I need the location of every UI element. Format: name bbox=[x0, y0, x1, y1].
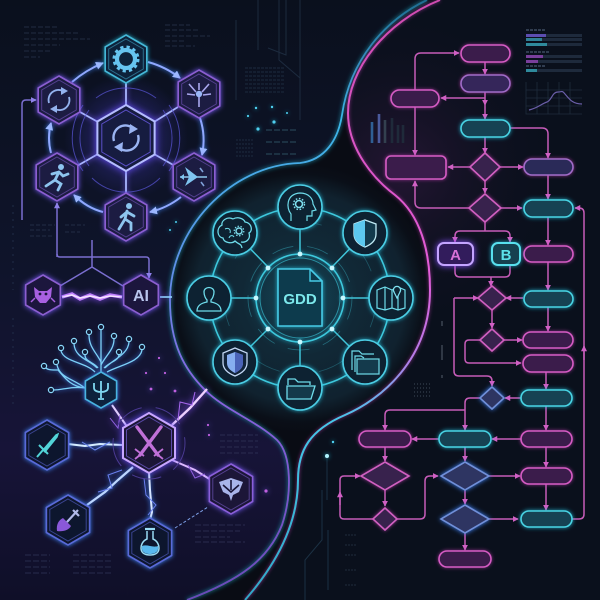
flowchart pink pills bbox=[359, 45, 573, 567]
hexagon: dash bbox=[173, 153, 215, 201]
hexagon: walker bbox=[105, 193, 147, 241]
skill tree end nodes bbox=[41, 324, 145, 393]
option B bbox=[492, 243, 520, 265]
decorative circuit traces and data marks bbox=[13, 0, 442, 600]
chart: top right status bars bbox=[526, 30, 582, 72]
hexagon: spark bulb bbox=[178, 70, 220, 118]
dashed link: potion to shield bbox=[175, 507, 208, 528]
hexagon: gear bbox=[105, 35, 147, 83]
loop ripple rings bbox=[72, 88, 180, 192]
icon: brain with gear bbox=[213, 211, 257, 255]
hexagon: shovel bbox=[46, 495, 90, 545]
hub spokes bbox=[209, 207, 391, 388]
panel: GDD hub bbox=[187, 185, 413, 410]
loop hub connectors bbox=[77, 83, 178, 193]
skill branches bbox=[46, 330, 142, 390]
hub rings bbox=[210, 208, 390, 388]
icon: shield lower bbox=[213, 340, 257, 384]
loop arrows bbox=[49, 62, 204, 212]
GDD document: GDD bbox=[283, 291, 317, 308]
hexagon: potion bbox=[128, 518, 172, 568]
hexagon: cycle bbox=[38, 76, 80, 124]
lightning: enemy to AI bbox=[62, 294, 172, 299]
GDD document bbox=[278, 269, 322, 326]
flowchart violet pills bbox=[461, 75, 573, 175]
right S-curve border bbox=[245, 0, 440, 600]
option B: B bbox=[501, 247, 512, 264]
icon: shield bbox=[343, 211, 387, 255]
panel: combat skill tree bbox=[25, 324, 253, 568]
flowchart diamond: merge bbox=[478, 286, 506, 310]
hexagon: enemy mask bbox=[26, 275, 60, 315]
icon: open folder bbox=[278, 366, 322, 410]
flowchart blue diamonds bbox=[441, 387, 504, 533]
flowchart cyan pills bbox=[439, 120, 573, 527]
option A bbox=[438, 243, 473, 265]
hub hexagon: crossed swords bbox=[113, 407, 185, 479]
central S-curve borders bbox=[170, 0, 427, 600]
lightning bolts from crossed swords bbox=[110, 389, 211, 480]
panel: core gameplay loop bbox=[36, 35, 220, 241]
hexagon: AI bbox=[124, 275, 158, 315]
chart: small vertical bars bbox=[372, 114, 403, 143]
cyan signal node bbox=[325, 454, 329, 458]
lightning bolts in blue bbox=[68, 442, 156, 520]
icon: map bbox=[369, 276, 413, 320]
flowchart magenta diamonds bbox=[361, 153, 504, 530]
icon: stacked folders bbox=[343, 340, 387, 384]
hexagon: emblem shield bbox=[209, 464, 253, 514]
connector: flow lines to AI and enemy bbox=[22, 100, 149, 286]
icon: head with gear bbox=[278, 185, 322, 229]
flowchart connectors bbox=[340, 53, 584, 550]
icon: user bbox=[187, 276, 231, 320]
hexagon: trident bbox=[85, 372, 117, 408]
chart: top right line chart bbox=[526, 82, 582, 114]
hub hexagon: core loop bbox=[97, 105, 155, 171]
hexagon: sword bbox=[25, 420, 69, 470]
hub nodes bbox=[254, 252, 345, 344]
hexagon: AI: AI bbox=[133, 288, 149, 305]
hexagon: runner bbox=[36, 153, 78, 201]
option A: A bbox=[450, 247, 461, 264]
small particles bbox=[169, 106, 334, 443]
panel: flowchart bbox=[340, 45, 584, 567]
